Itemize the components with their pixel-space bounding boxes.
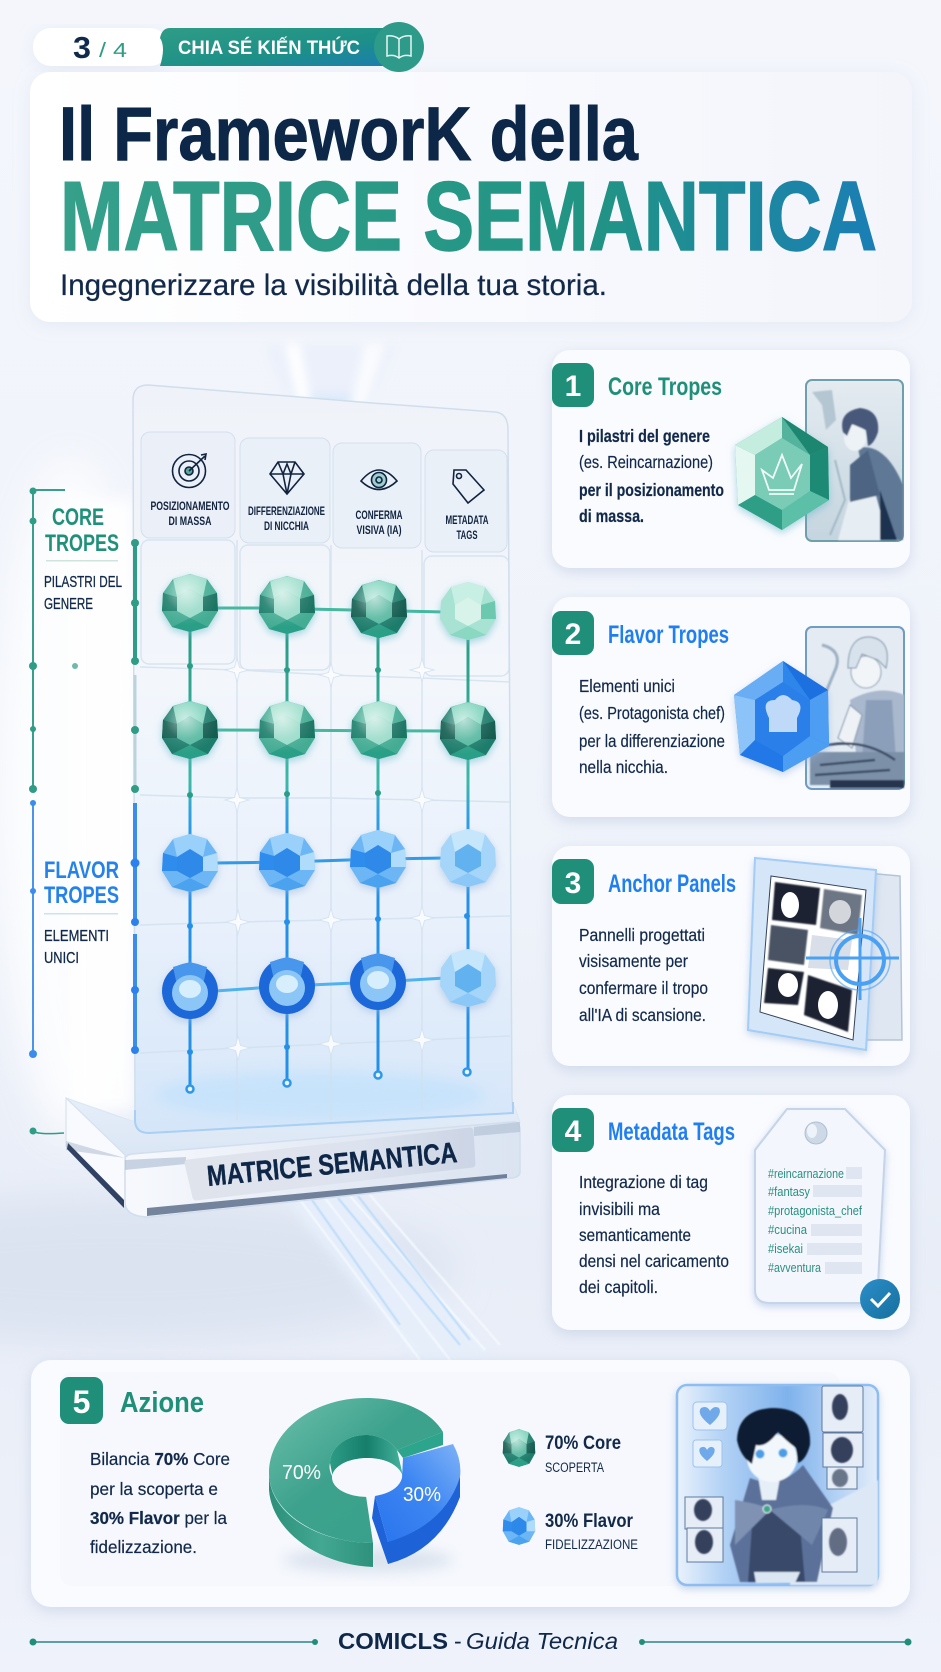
gem: chef hat (734, 661, 829, 772)
column header: posizionamento: DI MASSA (168, 516, 212, 528)
body text: Pannelli progettati (579, 925, 705, 945)
legend: flavor: FIDELIZZAZIONE (545, 1537, 638, 1552)
legend: flavor: 30% Flavor (545, 1511, 634, 1532)
gem row: core 1 (162, 574, 496, 640)
column header: conferma: CONFERMA (356, 510, 402, 522)
icon: heart bubbles (693, 1402, 727, 1467)
legend: core (503, 1429, 621, 1475)
left label: core tropes: PILASTRI DEL (44, 574, 122, 591)
donut chart 70/30: 70% (282, 1462, 321, 1484)
body text: (es. Protagonista chef) (579, 703, 725, 723)
body text: fidelizzazione. (90, 1537, 197, 1557)
category banner (160, 22, 424, 72)
heading: Metadata Tags (608, 1118, 735, 1146)
badge 2: 2 (565, 618, 581, 651)
body text: 30% Flavor per la (90, 1508, 227, 1528)
column header: posizionamento: POSIZIONAMENTO (150, 501, 230, 513)
body text: per la differenziazione (579, 731, 725, 751)
panel: core tropes (552, 350, 910, 568)
body text: Integrazione di tag (579, 1172, 708, 1192)
hanging tag (755, 1109, 900, 1319)
left label: core tropes: GENERE (44, 596, 93, 613)
body text: per la scoperta e (90, 1479, 218, 1499)
body text: invisibili ma (579, 1199, 660, 1219)
hashtag list: #fantasy (768, 1184, 810, 1199)
badge 1 (552, 363, 594, 407)
connector end nodes (186, 1068, 470, 1092)
body text (579, 1172, 729, 1297)
gem row: flavor 1 (162, 829, 496, 892)
badge 1: 1 (565, 370, 581, 403)
column header: differenziazione: DI NICCHIA (264, 521, 309, 533)
gem row: flavor 2 (162, 949, 496, 1019)
left bracket: core (29, 488, 139, 793)
hashtag list: #avventura (768, 1260, 822, 1275)
body text: confermare il tropo (579, 978, 708, 998)
gem row: core 2 (162, 701, 496, 760)
badge 3 (552, 859, 594, 904)
icon: diamond (270, 462, 304, 494)
body text: visisamente per (579, 951, 688, 971)
icon: check badge (860, 1279, 900, 1319)
base name plate: MATRICE SEMANTICA (206, 1137, 459, 1193)
column header: metadata: TAGS (456, 530, 478, 542)
matrix connectors (190, 608, 468, 1089)
column header: metadata: METADATA (446, 515, 488, 527)
page counter: / 4 (99, 40, 127, 62)
illustration: hero with comic panels (677, 1385, 878, 1585)
manga page under scanner (748, 858, 902, 1050)
body text (579, 676, 725, 777)
column header: differenziazione: DIFFERENZIAZIONE (248, 506, 325, 518)
left label: flavor tropes: TROPES (44, 882, 119, 909)
body text: per il posizionamento (579, 480, 724, 500)
body text: nella nicchia. (579, 757, 668, 777)
page counter (33, 28, 168, 66)
glass panel (133, 385, 513, 1133)
title (59, 92, 877, 271)
semantic matrix (66, 385, 520, 1217)
footer: - (454, 1628, 462, 1654)
legend: core: SCOPERTA (545, 1460, 604, 1475)
icon: target reticle (806, 918, 899, 1000)
body text: (es. Reincarnazione) (579, 452, 713, 472)
icon: chef hat (766, 695, 801, 732)
body text: di massa. (579, 506, 644, 526)
badge 3: 3 (565, 867, 581, 900)
panel: metadata tags (552, 1095, 910, 1330)
light rays above matrix (265, 345, 395, 445)
footer: COMICLS (338, 1628, 448, 1654)
gem: crown (735, 417, 829, 530)
icon: eye (361, 470, 397, 490)
header card (30, 72, 912, 322)
donut chart 70/30: 30% (403, 1484, 441, 1506)
hashtag list: #protagonista_chef (768, 1203, 862, 1218)
left bracket: flavor (29, 800, 140, 1134)
hashtag list: #reincarnazione (768, 1166, 844, 1181)
left label: core tropes (44, 504, 122, 613)
hashtag list: #cucina (768, 1222, 808, 1237)
column header: conferma (333, 443, 421, 548)
badge 5: 5 (73, 1384, 90, 1420)
donut chart 70/30 (269, 1398, 460, 1572)
floating comic cards (685, 1386, 863, 1572)
category banner: CHIA SÉ KIẾN THỨC (178, 37, 360, 59)
light beam below base (285, 1195, 500, 1365)
heading: Anchor Panels (608, 870, 736, 898)
badge 4 (552, 1108, 594, 1152)
body text: dei capitoli. (579, 1277, 658, 1297)
body text: I pilastri del genere (579, 426, 710, 446)
heading: Flavor Tropes (608, 621, 729, 649)
left label: core tropes: TROPES (45, 530, 119, 557)
left label: flavor tropes: FLAVOR (44, 857, 119, 884)
body text (579, 925, 708, 1025)
icon: crown (762, 455, 802, 494)
column header: differenziazione (240, 438, 330, 543)
icon: target (172, 454, 206, 488)
footer: Guida Tecnica (466, 1628, 618, 1654)
body text: Elementi unici (579, 676, 675, 696)
panel: azione (31, 1360, 910, 1607)
body text: densi nel caricamento (579, 1251, 729, 1271)
badge 4: 4 (565, 1115, 582, 1148)
left label: core tropes: CORE (52, 504, 104, 531)
column header: metadata (425, 450, 507, 552)
left label: flavor tropes: UNICI (44, 950, 79, 967)
icon: open book (374, 22, 424, 72)
heading: Azione (120, 1387, 204, 1419)
panel: anchor panels (552, 846, 910, 1066)
heading: Core Tropes (608, 373, 722, 401)
column header: conferma: VISIVA (IA) (356, 525, 402, 537)
badge 5 (60, 1377, 103, 1424)
body text: Bilancia 70% Core (90, 1449, 230, 1469)
body text: all'IA di scansione. (579, 1005, 706, 1025)
legend: flavor (503, 1507, 638, 1552)
legend: core: 70% Core (545, 1433, 621, 1454)
hashtag list (768, 1166, 862, 1275)
column header: posizionamento (141, 432, 235, 538)
page counter: 3 (73, 30, 91, 65)
panel: flavor tropes (552, 597, 910, 817)
title: Il FrameworK della (59, 92, 639, 177)
body text: semanticamente (579, 1225, 691, 1245)
acrylic base (66, 1095, 520, 1217)
hashtag list: #isekai (768, 1241, 803, 1256)
manga card: hero (806, 380, 903, 541)
body text (90, 1449, 230, 1557)
left label: flavor tropes: ELEMENTI (44, 928, 109, 945)
badge 2 (552, 611, 594, 655)
footer (30, 1628, 912, 1654)
body text (579, 426, 724, 526)
left label: flavor tropes (44, 857, 119, 967)
manga card: chef (806, 627, 904, 789)
icon: price tag (453, 470, 484, 503)
subtitle: Ingegnerizzare la visibilità della tua storia. (60, 269, 607, 302)
